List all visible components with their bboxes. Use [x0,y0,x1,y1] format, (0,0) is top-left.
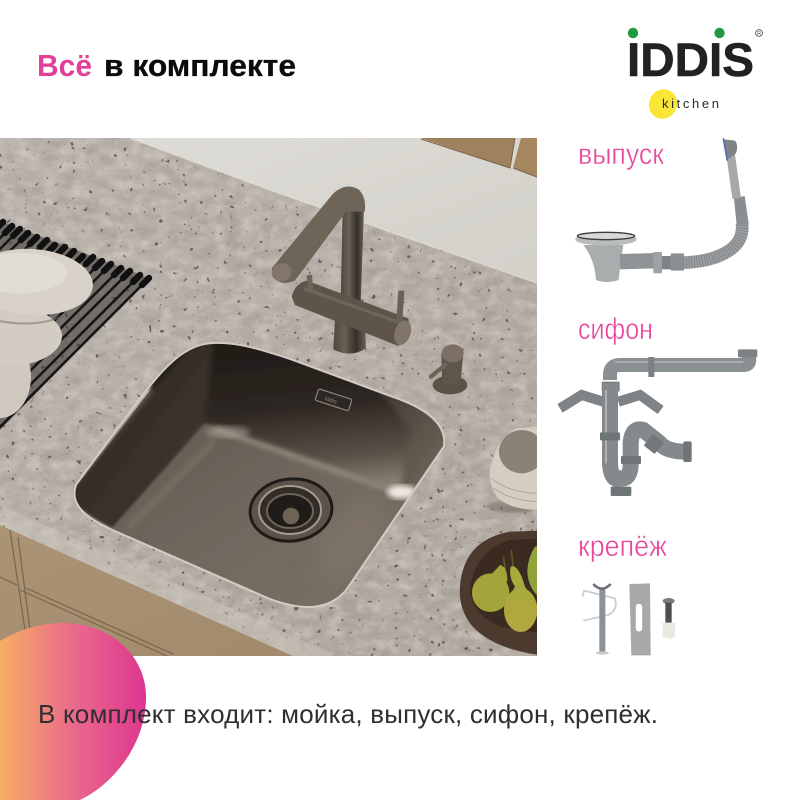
faucet column [340,212,364,300]
stainless sink bowl [74,342,446,608]
countertop front edge [0,515,330,662]
faucet mixer body [292,281,409,346]
title: Всё [37,48,92,83]
title: в комплекте [104,48,296,83]
label: крепёж: крепёж [578,530,667,563]
lower wooden cabinet [0,525,293,656]
soap dispenser [431,344,467,394]
wooden bowl with pears [460,531,540,655]
pears [472,545,540,632]
label: выпуск: выпуск [578,138,665,171]
wall [130,138,537,283]
gradient circle accent [0,623,146,800]
stacked plates [0,245,95,418]
granite countertop [0,138,537,656]
metal plate [629,583,651,655]
siphon top pipe [610,355,749,380]
product: sink outlet [575,138,749,282]
faucet spout [272,187,365,283]
IDDIS kitchen logo: IDDIS [627,33,754,86]
IDDIS kitchen logo: R [757,31,761,37]
caption: В комплект входит: мойка, выпуск, сифон, крепёж. [38,699,658,729]
IDDIS kitchen logo [627,28,762,124]
kitchen photo panel [0,138,544,662]
screw with plug [663,598,675,639]
label: сифон: сифон [578,313,653,346]
upper wooden cabinets [421,138,537,177]
mounting clip with bolt [583,584,616,655]
faucet [269,187,467,394]
sink brand badge: iddis [324,396,337,406]
ceramic cup [486,427,537,514]
sink drain [247,475,335,545]
drying rack [0,222,149,448]
siphon trap body [610,383,687,479]
sink brand badge [315,389,352,411]
product: fasteners [583,583,675,655]
product: siphon [560,349,757,496]
faucet base [333,320,366,354]
siphon side inlets [560,395,661,410]
IDDIS kitchen logo: kitchen [662,96,719,111]
